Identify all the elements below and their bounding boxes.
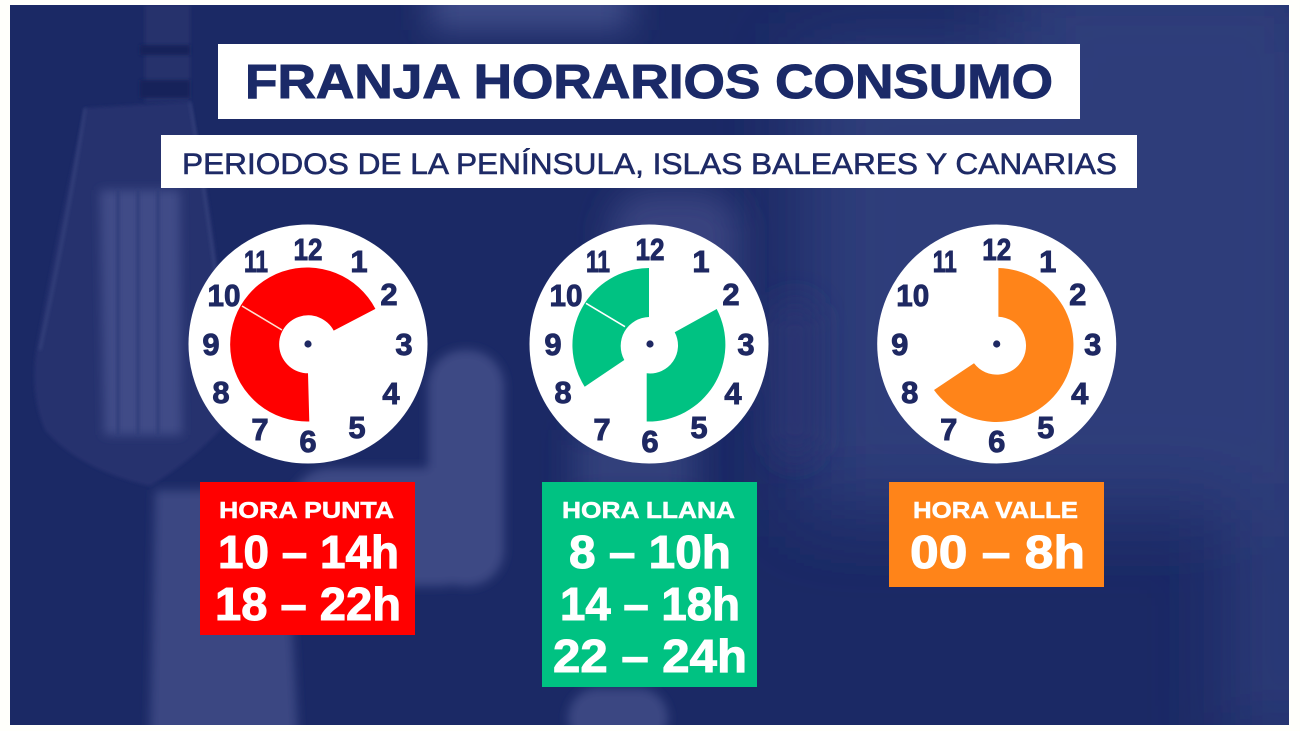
clock: hora valle: 3 — [1084, 327, 1101, 362]
panel: hora punta: 10 – 14h — [218, 526, 399, 578]
panel: hora valle: 00 – 8h — [910, 526, 1085, 578]
clock: hora llana: 1 — [692, 244, 710, 279]
panel: hora llana: 8 – 10h — [569, 526, 731, 578]
clock: hora valle: 11 — [933, 244, 957, 279]
clock: hora punta: 1 — [350, 244, 368, 279]
clock: hora valle: 6 — [988, 424, 1005, 459]
clock: hora punta: 2 — [380, 277, 398, 312]
clock: hora valle: 4 — [1071, 376, 1089, 411]
clock: hora punta: 4 — [382, 376, 400, 411]
clock: hora llana: 9 — [544, 327, 562, 362]
subtitle: PERIODOS DE LA PENÍNSULA, ISLAS BALEARES Y CANARIAS — [182, 148, 1117, 181]
clock: hora punta: 7 — [251, 412, 269, 447]
clock: hora punta: 10 — [208, 278, 240, 313]
clock: hora llana: 8 — [554, 375, 572, 410]
title: FRANJA HORARIOS CONSUMO — [245, 56, 1053, 109]
orange sector 0-8h — [934, 268, 1073, 422]
red sector 10-14h and 18-22h — [230, 268, 375, 422]
clock: hora llana: 7 — [593, 412, 611, 447]
clock: hora punta: 6 — [299, 424, 317, 459]
clock: hora punta — [188, 224, 428, 464]
clock: hora llana: 4 — [724, 376, 742, 411]
panel: hora valle: HORA VALLE — [913, 497, 1078, 523]
clock: hora llana: 10 — [550, 278, 582, 313]
clock: hora valle: 12 — [982, 232, 1011, 267]
panel: hora punta: 18 – 22h — [215, 578, 401, 630]
clock: hora llana: 5 — [690, 410, 708, 445]
panel: hora valle — [889, 482, 1104, 587]
clock: hora llana — [530, 224, 768, 464]
clock: hora llana: 11 — [586, 244, 610, 279]
clock: hora valle — [877, 224, 1116, 464]
green sector 8-12h — [572, 268, 649, 387]
clock: hora valle: 2 — [1069, 277, 1086, 312]
clock: hora valle: 8 — [901, 375, 918, 410]
panel: hora punta — [200, 482, 415, 635]
clock: hora punta: 12 — [294, 232, 322, 267]
panel: hora llana: 22 – 24h — [553, 630, 747, 682]
clock: hora valle: 9 — [891, 327, 908, 362]
icon: light bulb silhouette — [34, 5, 226, 486]
panel: hora punta: HORA PUNTA — [219, 497, 394, 523]
clock: hora valle: 1 — [1039, 244, 1056, 279]
clock: hora punta: 8 — [212, 375, 230, 410]
green sector 14-18h — [647, 309, 725, 422]
clock: hora llana: 12 — [636, 232, 664, 267]
clock: hora valle: 7 — [940, 412, 957, 447]
panel: hora llana: HORA LLANA — [562, 497, 735, 523]
panel: hora llana: 14 – 18h — [560, 578, 740, 630]
clock: hora llana: 3 — [737, 327, 755, 362]
clock: hora llana: 6 — [641, 424, 659, 459]
clock: hora punta: 3 — [395, 327, 413, 362]
clock: hora punta: 5 — [348, 410, 366, 445]
panel: hora llana — [542, 482, 757, 687]
clock: hora valle: 10 — [896, 278, 929, 313]
subtitle — [161, 135, 1137, 188]
clock: hora punta: 9 — [202, 327, 220, 362]
title — [218, 44, 1080, 119]
clock: hora valle: 5 — [1037, 410, 1054, 445]
clock: hora punta: 11 — [244, 244, 268, 279]
clock: hora llana: 2 — [722, 277, 740, 312]
